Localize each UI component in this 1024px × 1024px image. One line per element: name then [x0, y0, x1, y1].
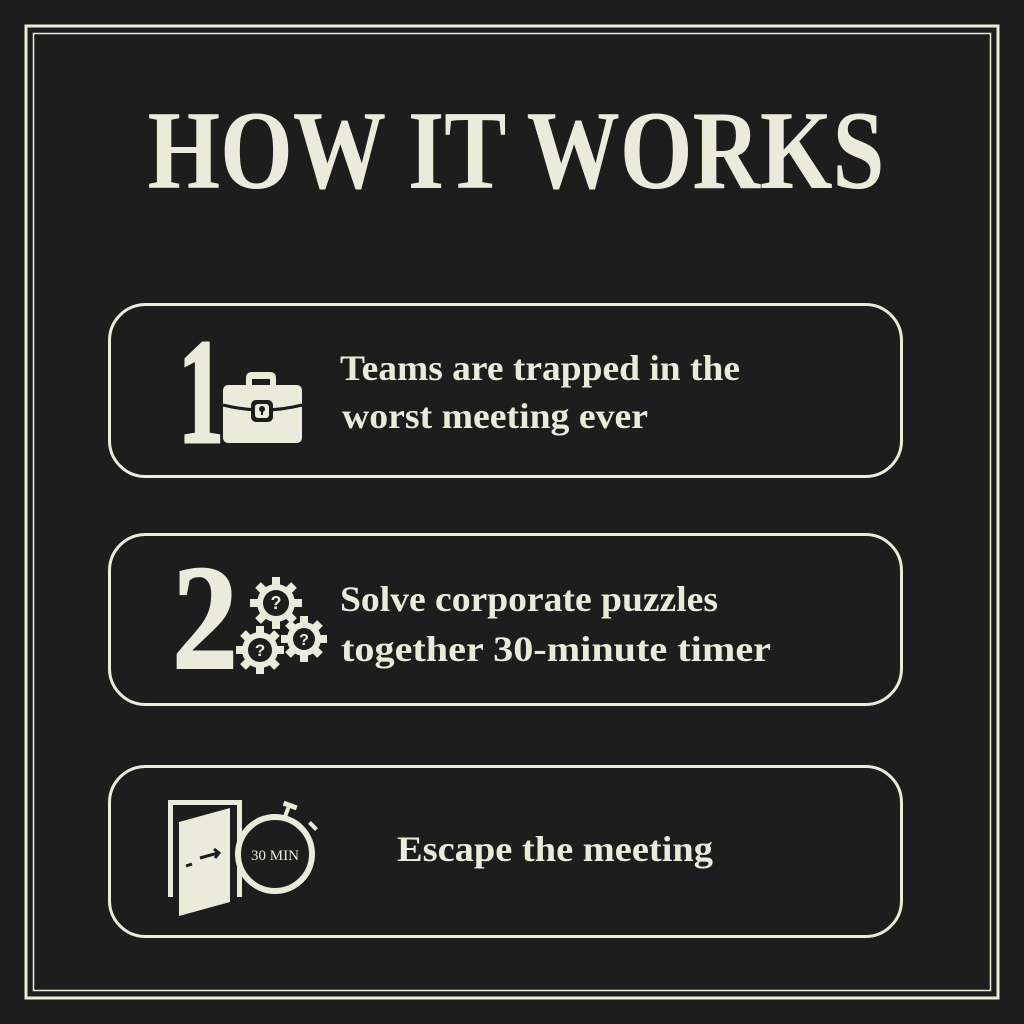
icon: stopwatch [238, 801, 318, 891]
icon: stopwatch: 30 MIN [251, 848, 299, 864]
icon: gears [236, 577, 327, 674]
number 1: 1 [178, 309, 224, 475]
text step 2: together 30-minute timer [341, 629, 771, 669]
icon: briefcase [223, 372, 302, 443]
text step 2: Solve corporate puzzles [340, 579, 718, 619]
panel: step 2 [110, 534, 902, 704]
number 2: 2 [172, 535, 238, 701]
text step 1: worst meeting ever [342, 396, 648, 436]
icon: gears: ? [270, 593, 282, 613]
text step 1: Teams are trapped in the [340, 348, 740, 388]
icon: gears: ? [255, 641, 265, 660]
icon: gears: ? [299, 632, 309, 649]
text step 3: Escape the meeting [397, 829, 713, 869]
panel: step 1 [110, 304, 902, 476]
panel: step 3 [110, 766, 902, 936]
icon: door [168, 800, 242, 916]
title: HOW IT WORKS [148, 89, 884, 213]
